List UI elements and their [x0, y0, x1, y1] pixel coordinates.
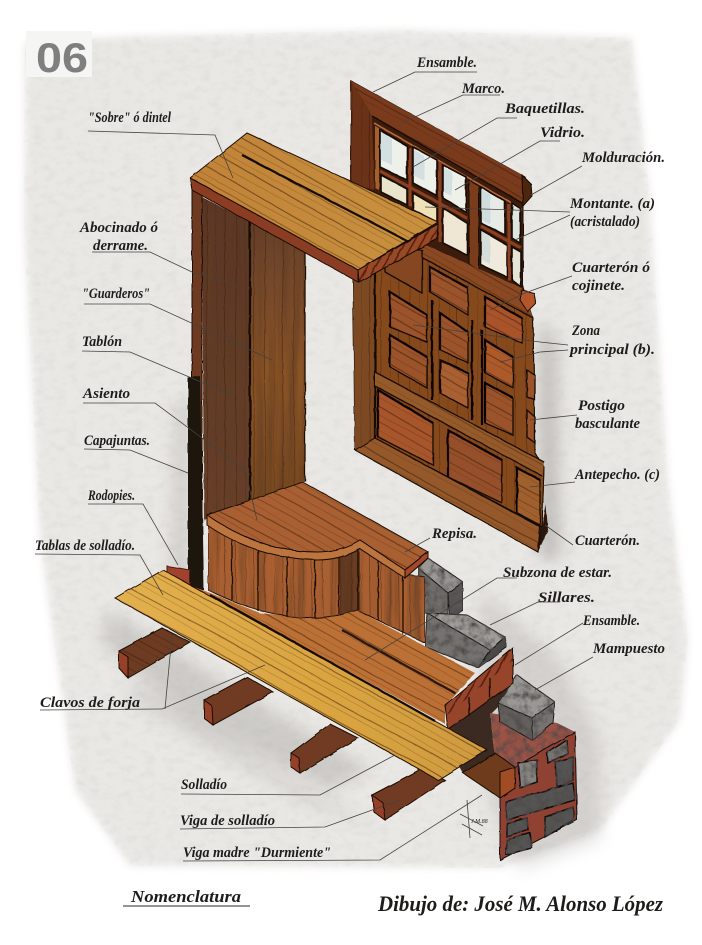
floorboards label: [35, 538, 163, 595]
ashlars label: [490, 590, 595, 625]
floor joist 4: [372, 768, 445, 820]
rubble label: [535, 641, 665, 690]
dintel label: [88, 110, 233, 178]
skirting label: [87, 488, 178, 565]
sleeper label: Viga madre "Durmiente": [183, 845, 331, 861]
nails label: [40, 635, 265, 711]
sill zone label: [530, 467, 660, 487]
bottom sill: [355, 438, 540, 552]
shutter label: [530, 398, 640, 432]
floor joist 2: [204, 677, 273, 725]
rubble base: [500, 732, 577, 860]
top frame band: [351, 81, 524, 209]
central mullion: [469, 180, 479, 270]
joint label top: [373, 55, 477, 92]
soft wall shadows: [100, 320, 600, 870]
mullion label: [425, 196, 655, 240]
plank label: [82, 334, 232, 395]
joist label: Viga de solladío: [180, 813, 275, 829]
wall reveal right plank: [250, 222, 305, 500]
seat label: [82, 386, 257, 520]
plank label: Tablón: [82, 334, 122, 350]
guards label: [82, 286, 272, 360]
splay label: [79, 220, 240, 285]
skirting label: Rodopies.: [87, 488, 135, 504]
splay label: derrame.: [93, 238, 148, 254]
glass panes: [380, 130, 521, 287]
outer post: [192, 190, 202, 590]
sill zone label: Antepecho. (c): [574, 467, 660, 483]
seat label: Asiento: [82, 386, 130, 402]
shutter panels: [378, 250, 540, 525]
nails label: Clavos de forja: [40, 695, 141, 711]
rail under glass: [410, 238, 533, 317]
middle ashlar: [425, 613, 507, 668]
small panel label: Cuarterón ó: [572, 260, 650, 276]
lower ashlar: [498, 675, 555, 740]
artist signature mark: J.M.88: [471, 819, 488, 825]
artist signature mark: [460, 800, 488, 838]
main zone label: [413, 323, 655, 362]
main zone label: principal (b).: [568, 342, 655, 358]
top board dintel: [190, 133, 438, 282]
shutter panel grain: [378, 267, 540, 525]
mortar top of base: [490, 713, 575, 767]
dintel label: "Sobre" ó dintel: [88, 110, 172, 126]
floor label: [181, 755, 395, 795]
glazing bars: [380, 148, 521, 280]
illustration: [115, 81, 577, 860]
seat top: [207, 482, 428, 578]
small panel label: [490, 260, 650, 310]
orange floor boards: [190, 585, 475, 724]
moulding label: Molduración.: [581, 150, 665, 166]
left jamb of window: [353, 250, 375, 450]
small panel label: cojinete.: [572, 278, 625, 294]
joist label: [180, 800, 400, 829]
shelf label: Repisa.: [431, 526, 477, 542]
glass label: [455, 125, 585, 190]
skirting: [167, 566, 190, 589]
lower joint label: [515, 613, 640, 665]
frame label: Marco.: [461, 81, 505, 97]
ashlars label: Sillares.: [538, 590, 595, 606]
lower joint label: Ensamble.: [582, 613, 640, 629]
splay label: Abocinado ó: [79, 220, 158, 236]
author credit: Dibujo de: José M. Alonso López: [377, 891, 663, 916]
moulding: [522, 175, 532, 206]
cross rail: [375, 372, 544, 476]
mullion label: (acristalado): [570, 214, 640, 230]
dark infill behind floor end: [440, 678, 513, 773]
masonry blocks: [418, 558, 577, 860]
title number: 06: [36, 34, 88, 81]
sitting zone label: Subzona de estar.: [503, 565, 612, 581]
joint label top: Ensamble.: [416, 55, 477, 71]
shutter label: basculante: [575, 416, 640, 432]
cover strip label: Capajuntas.: [84, 433, 150, 449]
left stile beside glass: [375, 126, 379, 190]
moulding label: [531, 150, 665, 195]
frame label: [402, 81, 505, 123]
sleeper label: [183, 795, 482, 861]
rubble label: Mampuesto: [592, 641, 665, 657]
shutter label: Postigo: [578, 398, 625, 414]
glazing bars label: Baquetillas.: [504, 101, 585, 117]
cover strip label: [84, 433, 188, 473]
floorboards label: Tablas de solladío.: [35, 538, 135, 554]
mullion label: Montante. (a): [569, 196, 655, 212]
window and shutter assembly: [351, 81, 548, 552]
sitting zone label: [365, 565, 612, 660]
right end block: [538, 505, 548, 552]
guards label: "Guarderos": [82, 286, 150, 302]
glass tints: [381, 132, 490, 264]
floor label: Solladío: [181, 777, 227, 793]
wall reveal left plank: [202, 197, 250, 520]
upper ashlar: [418, 558, 463, 620]
floor joist 1: [119, 628, 190, 678]
main sleeper beam: [463, 753, 515, 798]
panel shadows and stiles: [378, 267, 540, 513]
heading nomenclature: Nomenclatura: [130, 887, 242, 906]
lower panel label: [545, 525, 640, 549]
lower panel label: Cuarterón.: [575, 533, 640, 549]
frame body: [351, 81, 544, 552]
shutter field: [375, 232, 544, 527]
main zone label: Zona: [571, 323, 600, 339]
seat base, staved: [208, 524, 425, 643]
shelf label: [405, 526, 477, 552]
floor board end: [445, 648, 513, 730]
title number: [26, 31, 92, 81]
floor joist 3: [291, 724, 358, 773]
yellow long plank: [115, 570, 487, 780]
glass label: Vidrio.: [540, 125, 585, 141]
cover strip capajuntas: [188, 376, 204, 590]
glazing bars label: [413, 101, 585, 167]
